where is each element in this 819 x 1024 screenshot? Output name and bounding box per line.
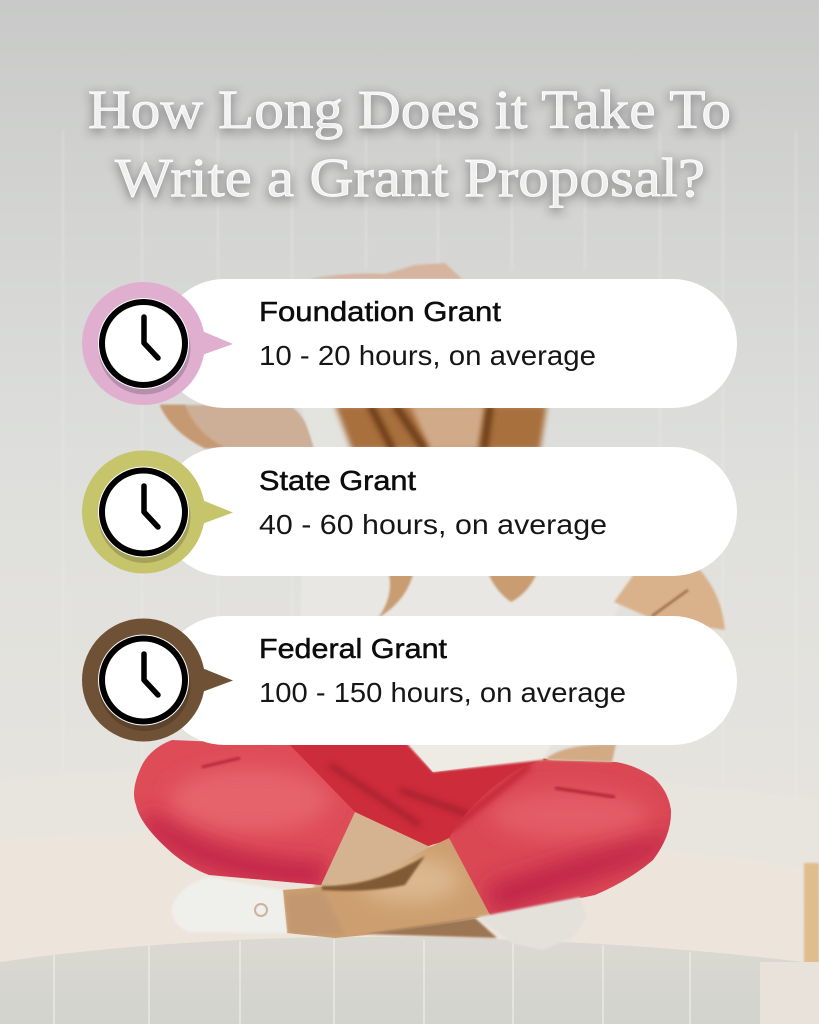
left arm shadow edge <box>160 405 225 448</box>
shirt upper <box>300 405 360 450</box>
hair mass <box>335 405 547 450</box>
right arm <box>614 570 725 630</box>
left pant leg <box>134 740 355 885</box>
panel: state grant <box>82 447 737 576</box>
arm crease <box>652 590 688 616</box>
long hair strands <box>378 570 538 618</box>
title: Write a Grant Proposal? <box>115 147 705 208</box>
shirt lower <box>300 570 635 622</box>
neck <box>410 405 486 450</box>
pill <box>160 279 737 408</box>
dark hair strands <box>370 405 490 450</box>
heading: Federal Grant <box>259 633 447 664</box>
pill <box>160 616 737 745</box>
shirt hem <box>407 744 552 772</box>
center of pants <box>250 742 600 846</box>
photo: woman sitting cross-legged <box>120 263 725 950</box>
speech badge <box>82 618 233 742</box>
front leg <box>283 838 490 938</box>
heading: Foundation Grant <box>259 296 501 327</box>
speech badge <box>82 282 233 405</box>
heading: State Grant <box>259 465 416 496</box>
shadow under crossed leg <box>366 918 497 938</box>
raised hand behind head <box>308 263 462 279</box>
hours: 100 - 150 hours, on average <box>259 677 626 708</box>
icon: clock <box>98 466 190 563</box>
right pant leg <box>449 760 672 916</box>
left shoe <box>172 877 287 933</box>
speech badge <box>82 450 233 574</box>
icon: clock <box>98 298 190 394</box>
panel: foundation grant <box>82 279 737 408</box>
pill <box>160 447 737 576</box>
hand on waist <box>545 744 616 762</box>
right shoe <box>478 897 587 950</box>
icon: clock <box>98 634 190 731</box>
panel: federal grant <box>82 616 737 745</box>
title: How Long Does it Take To <box>88 79 731 140</box>
hours: 10 - 20 hours, on average <box>259 340 596 371</box>
hours: 40 - 60 hours, on average <box>259 509 607 540</box>
back leg <box>312 805 432 892</box>
shadow between legs <box>322 856 425 891</box>
left arm <box>160 405 314 448</box>
shoe buckle <box>255 904 267 916</box>
title <box>88 79 731 208</box>
